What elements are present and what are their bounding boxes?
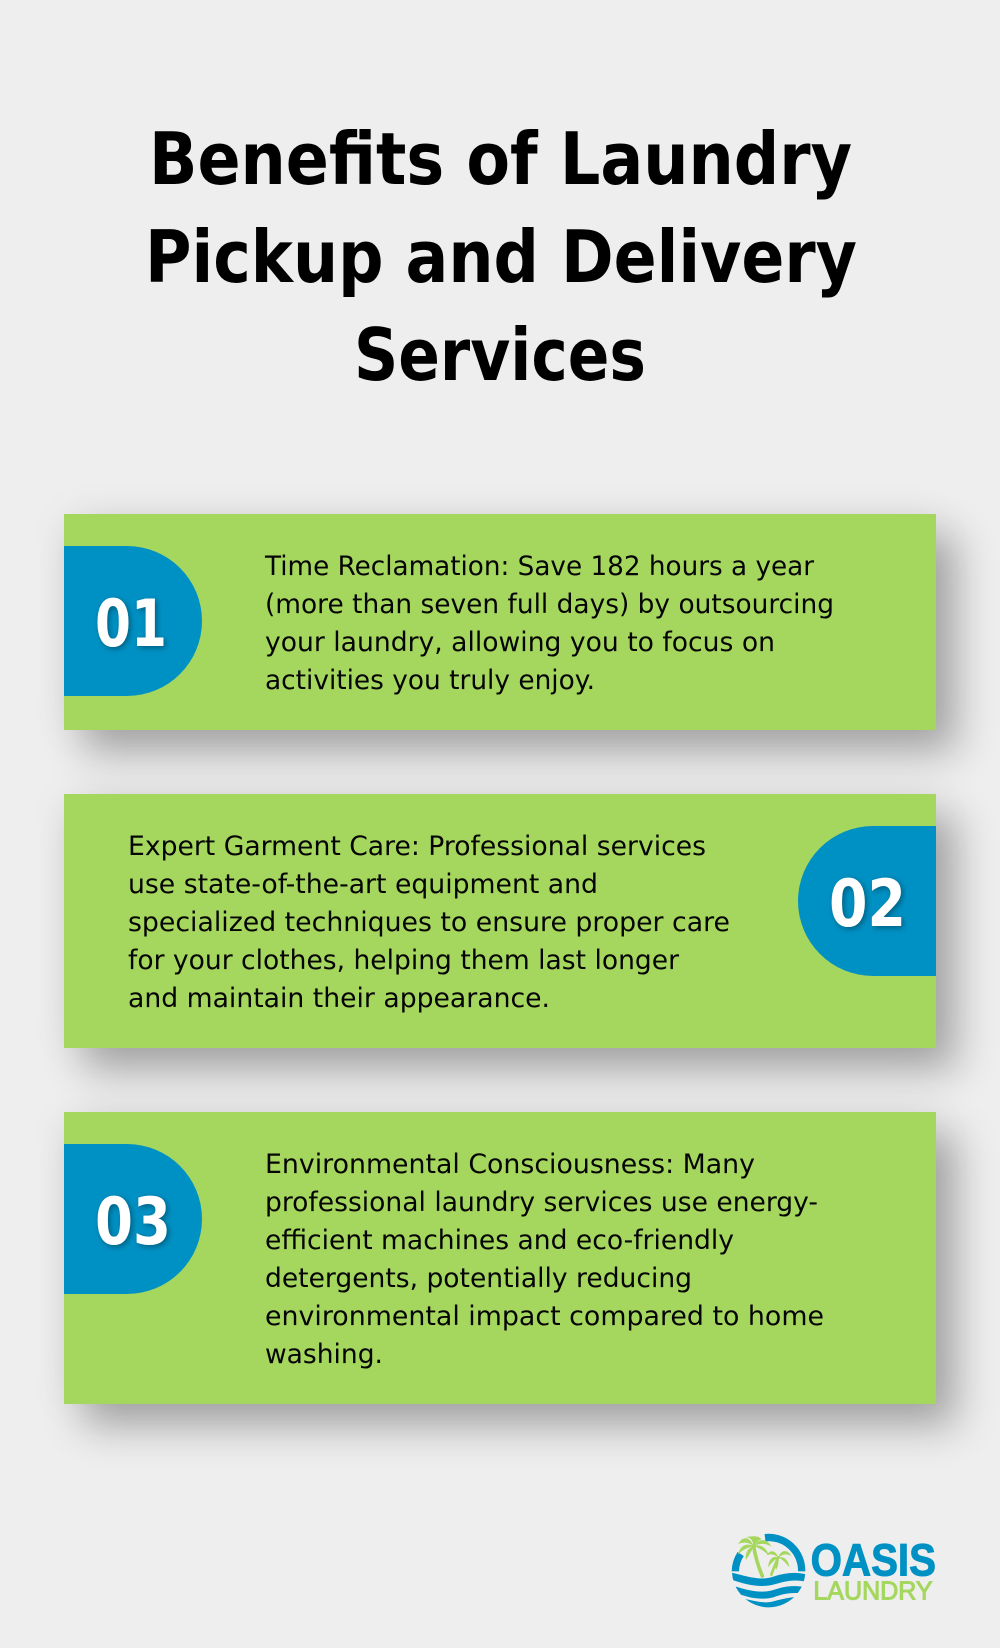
icon: palm and waves [730,1536,807,1610]
panel: time reclamation [64,514,936,730]
title: Benefits of Laundry [149,117,852,201]
text block: expert garment care: and maintain their appearance. [128,983,550,1014]
badge: 01 [64,546,202,696]
text block: expert garment care: specialized techniques to ensure proper care [128,907,730,938]
title: Pickup and Delivery [145,215,857,299]
text block: environmental consciousness: Environmental Consciousness: Many [265,1149,755,1180]
badge: 01: 01 [95,587,167,662]
text block: environmental consciousness: efficient machines and eco-friendly [265,1225,734,1256]
title [145,117,857,397]
text block: time reclamation: Time Reclamation: Save 182 hours a year [264,551,815,582]
badge: 02 [798,826,936,976]
text block: environmental consciousness: professional laundry services use energy- [265,1187,818,1218]
text block: time reclamation [264,551,834,696]
text block: time reclamation: activities you truly enjoy. [265,665,595,696]
title: Services [354,313,646,397]
text block: environmental consciousness: detergents, potentially reducing [265,1263,692,1294]
text block: environmental consciousness: environmental impact compared to home [265,1301,824,1332]
text block: expert garment care: use state-of-the-art equipment and [128,869,598,900]
logo: Oasis Laundry [732,1534,936,1608]
logo word: LAUNDRY: LAUNDRY [813,1577,933,1605]
text block: time reclamation: (more than seven full days) by outsourcing [265,589,834,620]
badge: 03: 03 [95,1185,171,1260]
text block: expert garment care: Expert Garment Care: Professional services [128,831,706,862]
text block: environmental consciousness: washing. [265,1339,383,1370]
panel: environmental consciousness [64,1112,936,1404]
text block: expert garment care [128,831,730,1014]
text block: environmental consciousness [265,1149,824,1370]
panel: expert garment care [64,794,936,1048]
badge: 03 [64,1144,202,1294]
text block: expert garment care: for your clothes, helping them last longer [128,945,680,976]
logo word: OASIS: OASIS [811,1535,936,1586]
text block: time reclamation: your laundry, allowing you to focus on [265,627,775,658]
badge: 02: 02 [829,867,906,942]
